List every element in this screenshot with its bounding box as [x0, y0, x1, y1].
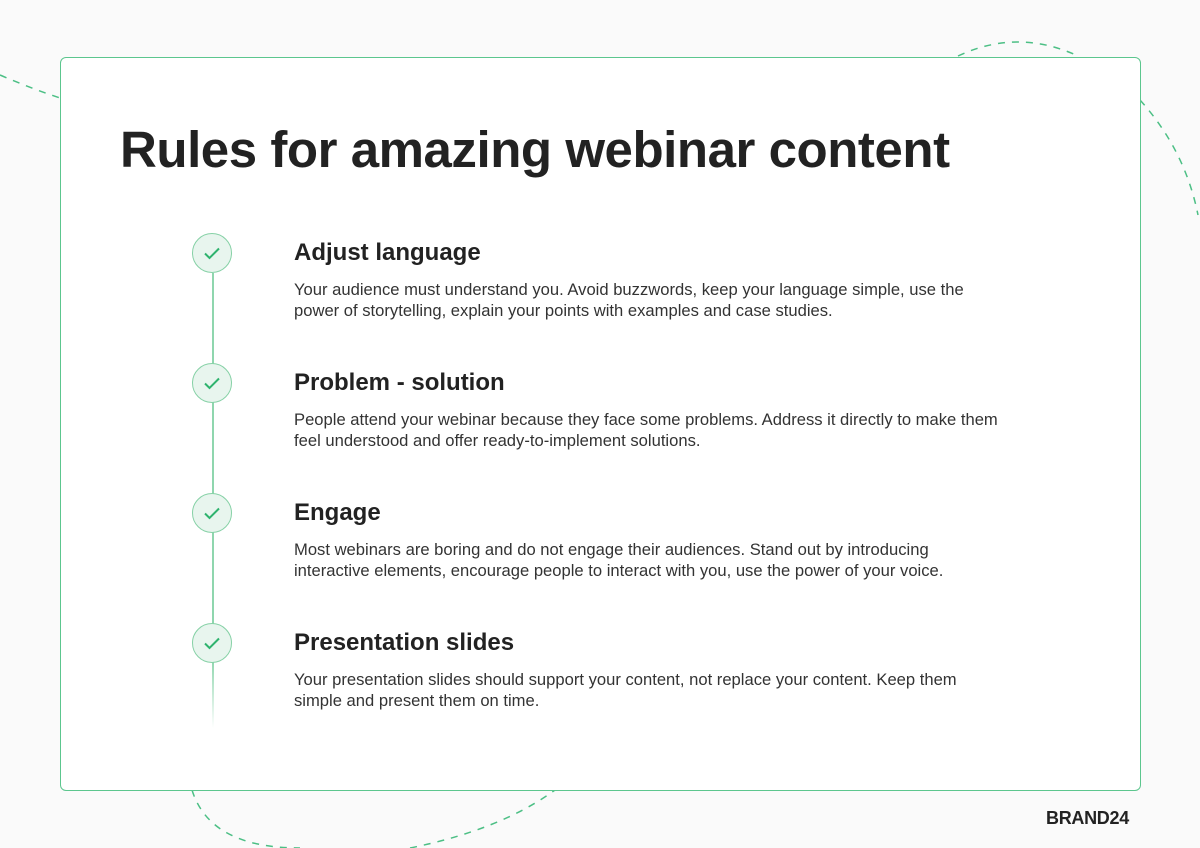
text: power of storytelling, explain your points with examples and case studies.	[294, 301, 833, 320]
text: Your audience must understand you. Avoid buzzwords, keep your language simple, use the	[294, 280, 964, 299]
text: feel understood and offer ready-to-implement solutions.	[294, 431, 700, 450]
text: Most webinars are boring and do not engage their audiences. Stand out by introducing	[294, 540, 929, 559]
heading: Problem - solution	[294, 369, 505, 396]
text: People attend your webinar because they face some problems. Address it directly to make them	[294, 410, 998, 429]
text	[294, 410, 998, 450]
text	[294, 540, 943, 580]
text: Your presentation slides should support your content, not replace your content. Keep them	[294, 670, 957, 689]
icon: check	[192, 233, 232, 273]
icon: check	[192, 363, 232, 403]
text: simple and present them on time.	[294, 691, 539, 710]
heading: Adjust language	[294, 239, 481, 266]
item: adjust language	[192, 233, 964, 320]
item: presentation slides	[192, 623, 957, 710]
item: engage	[192, 493, 943, 580]
text: interactive elements, encourage people to interact with you, use the power of your voice.	[294, 561, 943, 580]
heading: Presentation slides	[294, 629, 514, 656]
timeline line	[212, 273, 214, 728]
icon: check	[192, 623, 232, 663]
icon: check	[192, 493, 232, 533]
brand logo: BRAND24	[1046, 808, 1129, 828]
item: problem solution	[192, 363, 998, 450]
text	[294, 670, 957, 710]
card panel	[60, 57, 1141, 791]
heading: Engage	[294, 499, 381, 526]
text	[294, 280, 964, 320]
title: Rules for amazing webinar content	[120, 121, 950, 178]
